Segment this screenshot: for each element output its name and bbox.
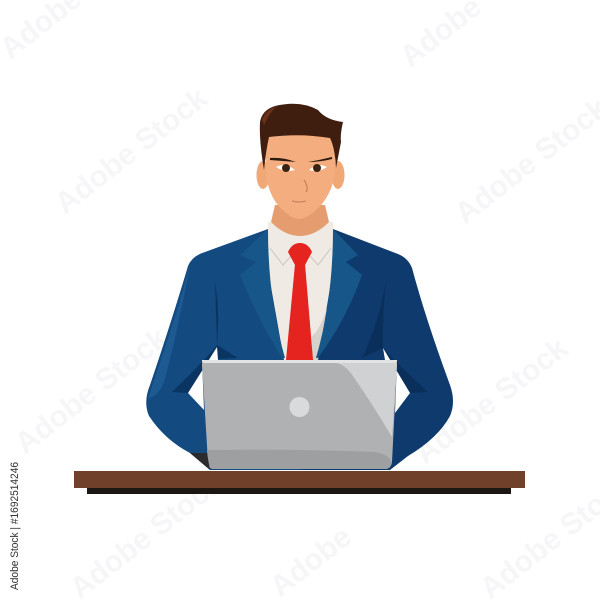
laptop lid (202, 360, 397, 469)
tie knot (288, 243, 312, 265)
tie (286, 243, 313, 360)
shirt (268, 222, 333, 360)
left eyebrow (270, 158, 296, 162)
right eyebrow (308, 157, 332, 162)
collar line right (310, 248, 331, 265)
white gap left (188, 347, 218, 410)
shirt body (268, 222, 333, 360)
neck (271, 205, 329, 236)
jacket right half (300, 229, 453, 470)
left eye (276, 164, 295, 172)
lid top edge (203, 360, 396, 363)
right lapel (316, 229, 362, 358)
jacket left half (146, 229, 300, 470)
nose (304, 180, 307, 192)
left cuff (190, 453, 210, 470)
left sleeve highlight (148, 265, 190, 398)
white gap right (383, 348, 410, 413)
logo (290, 397, 310, 417)
lid reflection (337, 363, 397, 437)
hair highlight (262, 106, 277, 125)
tie blade (286, 264, 313, 360)
face (265, 125, 336, 219)
lapels (240, 229, 362, 358)
desk (74, 471, 525, 494)
laptop (202, 360, 397, 469)
watermark pattern: Adobe Stock (9, 321, 174, 461)
right eye (309, 164, 327, 172)
right ear (332, 161, 344, 189)
desk shadow (87, 488, 511, 494)
left lapel (240, 229, 285, 358)
lid bottom band (207, 450, 391, 469)
stock caption: Adobe Stock | #1692514246 (9, 462, 21, 590)
right arm seam (362, 282, 428, 393)
mouth (292, 201, 306, 202)
jacket (146, 229, 453, 470)
watermark pattern: Adobe Stock (409, 331, 574, 471)
collar line left (270, 248, 291, 265)
left ear (256, 161, 270, 189)
left arm seam (172, 282, 238, 393)
shirt shadow (312, 308, 327, 360)
watermark pattern: Adobe Stock (49, 81, 214, 221)
desk top (74, 471, 525, 488)
neck and head (256, 104, 344, 236)
hair (260, 104, 343, 170)
